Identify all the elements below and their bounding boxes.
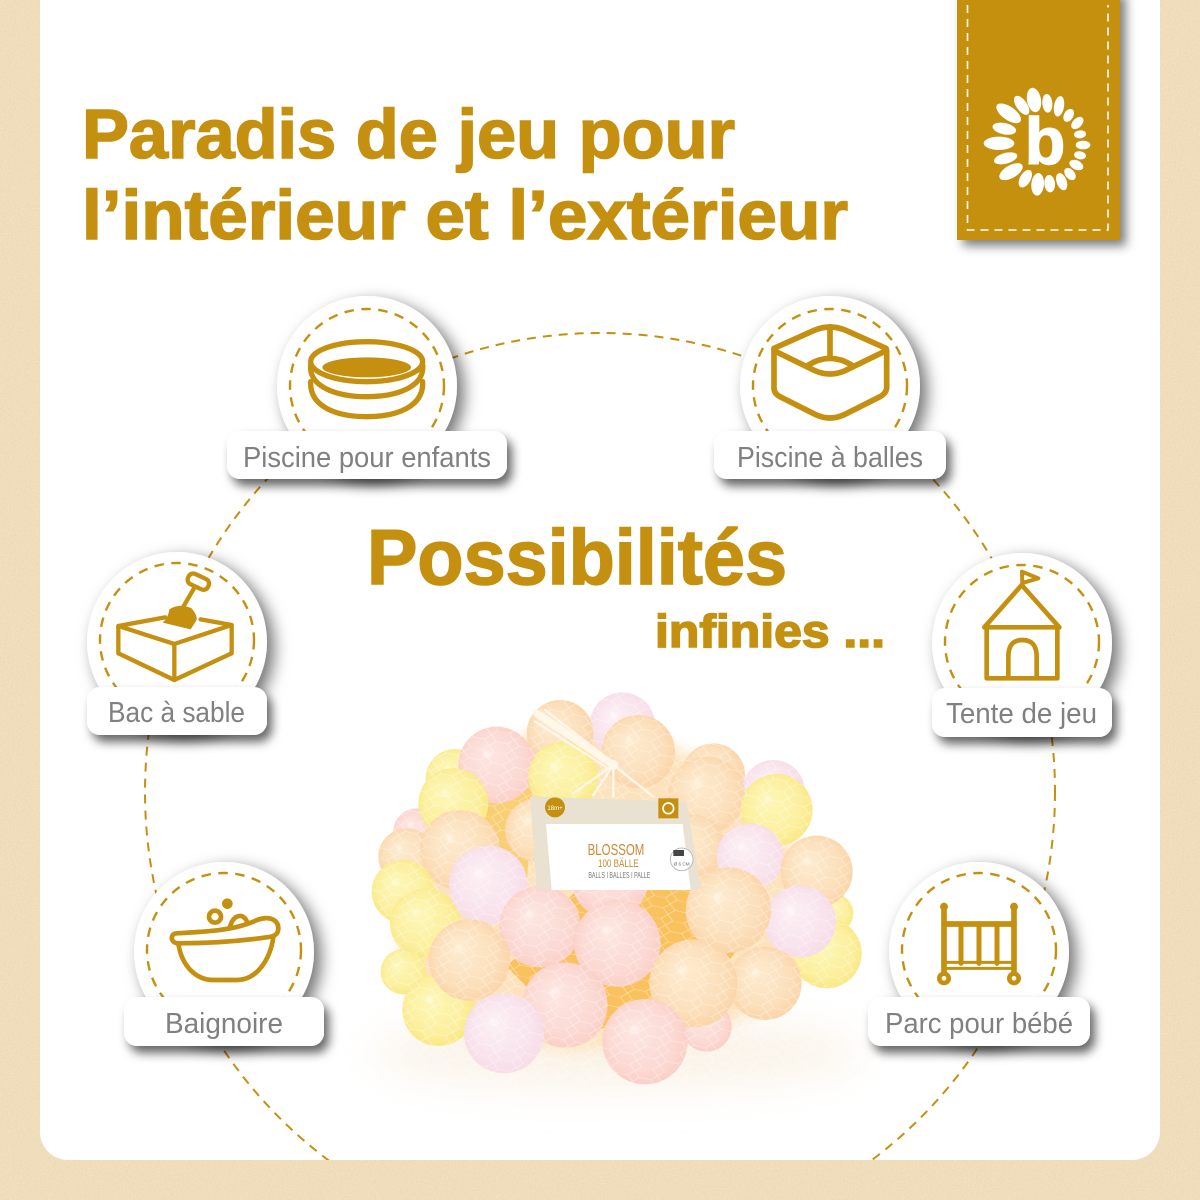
label <box>714 431 946 479</box>
icon: foldable ball pit <box>774 327 887 418</box>
product label card: Ø 6 CM <box>674 861 690 866</box>
use: Piscine à balles <box>714 296 946 479</box>
label <box>124 997 324 1046</box>
title: Paradis de jeu pour <box>82 95 735 173</box>
heading: Possibilités infinies: Possibilités <box>367 513 787 601</box>
label: Piscine à balles <box>737 442 923 474</box>
label: Tente de jeu <box>946 698 1097 730</box>
use: Bac à sable <box>87 552 267 735</box>
icon: blossom logo <box>984 87 1090 196</box>
label <box>868 997 1090 1046</box>
use: Parc pour bébé <box>868 862 1090 1046</box>
product: net bag of pastel balls <box>367 690 863 1090</box>
label <box>87 687 267 735</box>
icon: sandbox with shovel <box>118 572 232 680</box>
use: Tente de jeu <box>932 553 1112 737</box>
label: Baignoire <box>165 1008 283 1040</box>
icon: play tent <box>984 572 1059 678</box>
brand tag with logo: b <box>1025 104 1065 178</box>
use: Baignoire <box>124 862 324 1046</box>
product label card: 18m+ <box>547 806 563 812</box>
label: Bac à sable <box>108 697 245 729</box>
brand tag with logo <box>957 0 1120 240</box>
icon: paddling pool <box>311 342 423 417</box>
icon: baby bath <box>172 898 278 980</box>
net mesh <box>367 690 863 1083</box>
title <box>82 95 848 254</box>
net knot and strings <box>535 710 653 797</box>
label <box>932 688 1112 737</box>
product label card: BALLS I BALLES I PALLE <box>588 870 651 880</box>
dashed ring connecting the uses <box>145 333 1055 1200</box>
product label card <box>530 797 701 890</box>
product label card: BLOSSOM <box>588 842 644 859</box>
heading: Possibilités infinies <box>367 513 885 657</box>
icon: baby playpen <box>939 903 1019 983</box>
product label card: 100 BÄLLE <box>598 858 639 870</box>
use: Piscine pour enfants <box>227 296 507 479</box>
heading: Possibilités infinies: infinies ... <box>655 605 885 657</box>
label: Parc pour bébé <box>885 1008 1073 1040</box>
title: l’intérieur et l’extérieur <box>82 176 848 254</box>
label <box>227 431 507 479</box>
label: Piscine pour enfants <box>243 442 491 474</box>
